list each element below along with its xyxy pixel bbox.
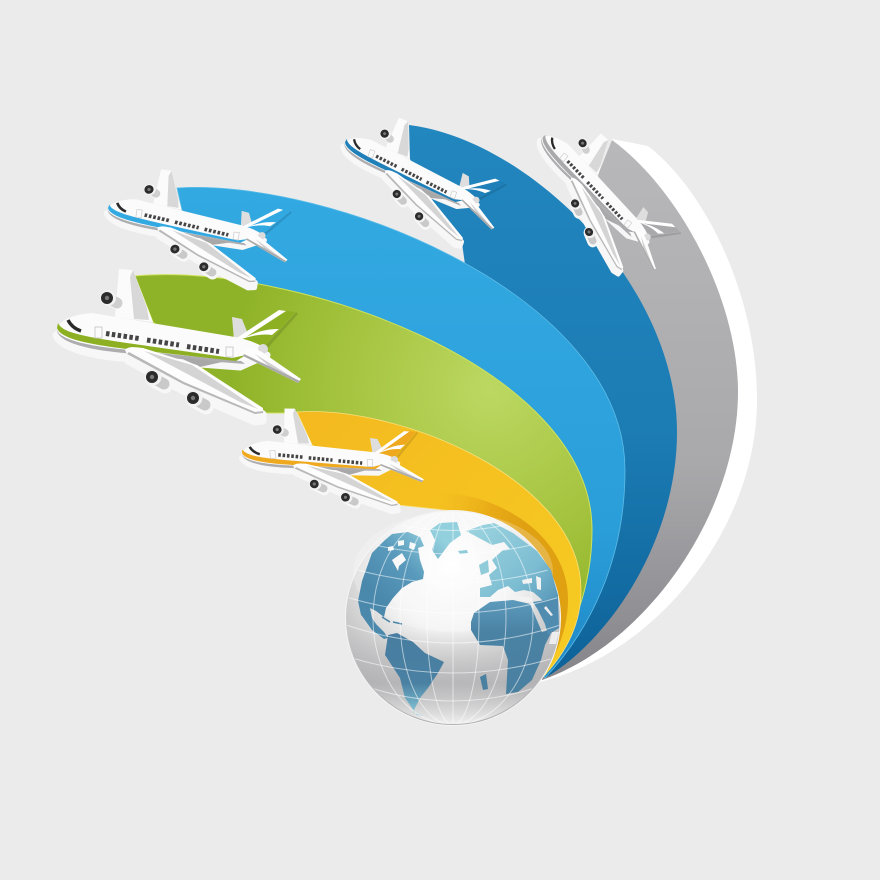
- airplane: gray: [504, 106, 701, 291]
- Black and Caspian seas: [512, 576, 541, 602]
- airplane: yellow: [238, 401, 426, 520]
- Eurasia: [466, 523, 558, 612]
- airplane: light blue: [98, 165, 299, 291]
- globe: [346, 510, 560, 727]
- globe sphere: [346, 510, 560, 726]
- Great Britain: [479, 560, 489, 575]
- continents: [358, 522, 559, 716]
- South America: [385, 633, 444, 716]
- Arabia and South Asia: [533, 598, 559, 635]
- ribbon: orange inner fold: [440, 492, 568, 682]
- ribbon: yellow: [297, 412, 581, 680]
- Gulf and Indian Ocean islands: [544, 606, 559, 644]
- globe grid: [346, 510, 560, 727]
- North America: [358, 532, 424, 639]
- ribbon: dark blue: [409, 125, 677, 678]
- Caribbean islands: [382, 617, 402, 624]
- ribbon: green: [135, 275, 592, 675]
- globe lower shading: [347, 512, 559, 724]
- ribbon: gray: [542, 140, 738, 680]
- Iceland: [458, 550, 468, 554]
- airplane: dark blue: [324, 104, 519, 255]
- Madagascar: [480, 674, 488, 690]
- Greenland: [430, 522, 461, 559]
- airplane: green: [56, 269, 301, 422]
- ribbon: white outer band: [530, 139, 757, 682]
- globe upper highlight: [353, 512, 553, 632]
- Africa: [471, 600, 553, 694]
- ribbon: light blue: [177, 187, 625, 678]
